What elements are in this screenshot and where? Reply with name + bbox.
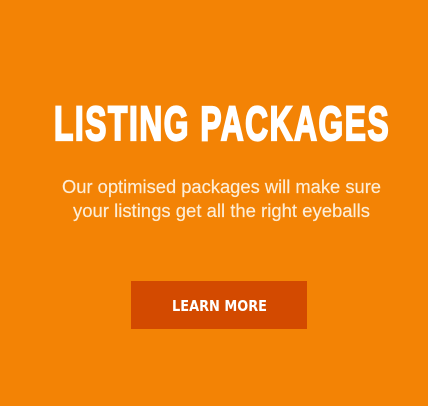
button: learn more: LEARN MORE	[172, 297, 267, 315]
title: LISTING PACKAGES	[54, 96, 389, 151]
button: learn more	[131, 281, 307, 329]
subtitle text block: your listings get all the right eyeballs	[73, 200, 370, 221]
subtitle text block	[62, 176, 381, 221]
subtitle text block: Our optimised packages will make sure	[62, 176, 381, 197]
